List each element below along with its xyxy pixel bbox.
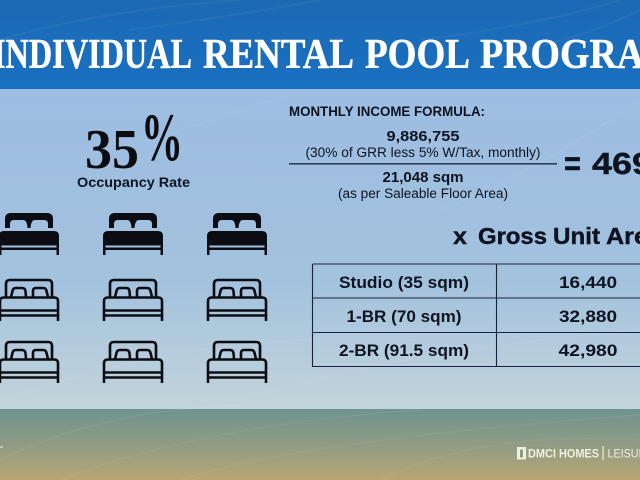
formula result: = (564, 145, 581, 182)
bed icons: vacant row 2 (0, 342, 266, 383)
formula fraction: 21,048 sqm (382, 169, 464, 186)
unit area table (312, 264, 640, 366)
unit area table: 32,880 (559, 308, 617, 326)
title: RENTAL (203, 32, 354, 78)
unit area table: 42,980 (558, 342, 618, 360)
gross unit area heading (453, 223, 640, 249)
footer logo: DMCI HOMES (528, 448, 599, 460)
footer logo (0, 446, 640, 460)
formula fraction (289, 128, 557, 201)
unit area table: Studio (35 sqm) (339, 274, 469, 292)
formula fraction: 9,886,755 (386, 128, 460, 145)
formula heading: MONTHLY INCOME FORMULA: (289, 104, 485, 119)
title: INDIVIDUAL (0, 32, 192, 78)
occupancy percentage (85, 99, 183, 181)
unit area table: 16,440 (559, 274, 617, 292)
gross unit area heading: x (453, 223, 467, 249)
bed icons: vacant row 1 (0, 280, 266, 321)
title (0, 32, 640, 78)
occupancy percentage: 35 (85, 119, 139, 181)
formula fraction: (30% of GRR less 5% W/Tax, monthly) (306, 145, 540, 160)
unit area table: 1-BR (70 sqm) (346, 308, 462, 326)
formula fraction: (as per Saleable Floor Area) (338, 186, 508, 201)
occupancy percentage: % (141, 99, 183, 175)
bed icons: occupied row (0, 213, 267, 255)
gross unit area heading: Gross (478, 223, 547, 249)
occupancy label: Occupancy Rate (77, 174, 190, 190)
formula result (564, 145, 640, 182)
unit area table: 2-BR (91.5 sqm) (339, 342, 469, 360)
gross unit area heading: Unit (553, 223, 600, 249)
header band (0, 0, 640, 89)
title: POOL (365, 32, 470, 78)
